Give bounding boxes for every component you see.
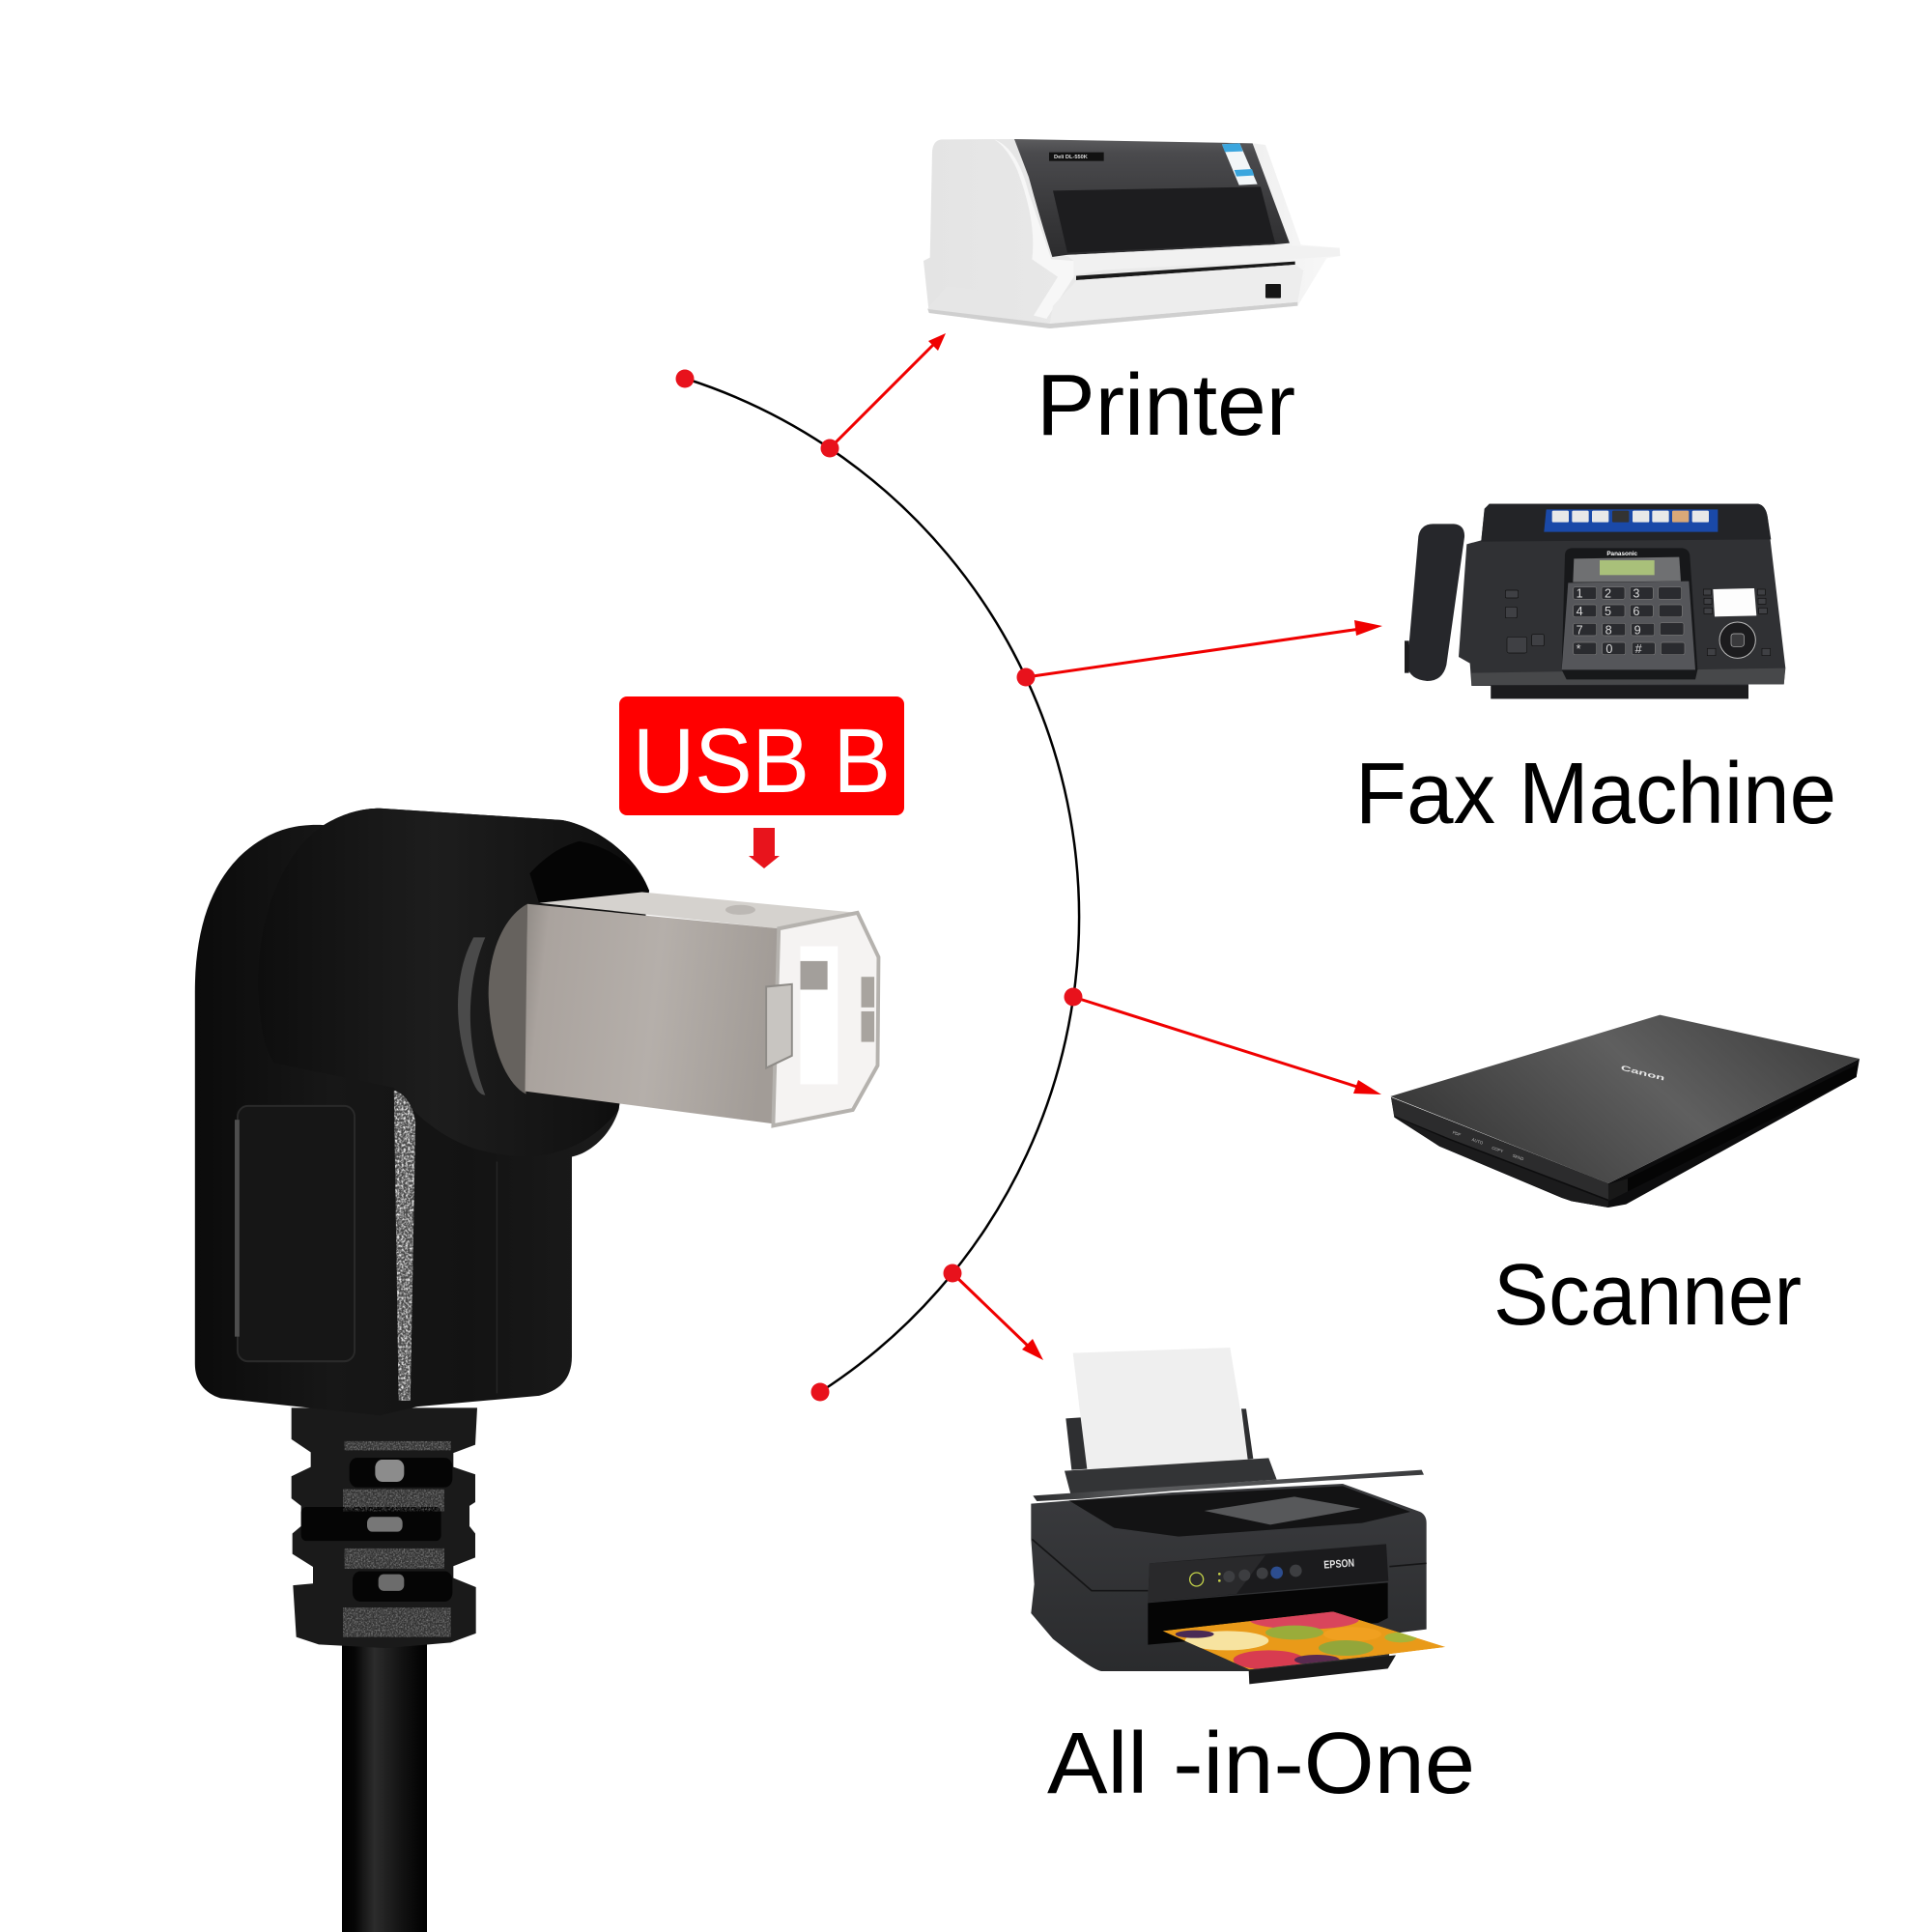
control panel — [1148, 1544, 1388, 1602]
fax keypad panel: 2 — [1605, 587, 1611, 601]
fax feature banner — [1544, 509, 1718, 532]
plug opening — [766, 913, 878, 1125]
arrow: to all-in-one — [943, 1264, 1043, 1360]
control panel: EPSON — [1323, 1557, 1354, 1572]
label: USB B: USB B — [633, 710, 891, 812]
fax keypad panel: * — [1577, 642, 1581, 656]
fax left buttons — [1505, 590, 1544, 653]
scanner front — [1391, 1097, 1608, 1200]
fax keypad panel: 1 — [1577, 587, 1583, 601]
fax keypad panel: 3 — [1633, 587, 1639, 601]
fax keypad panel: 7 — [1577, 623, 1583, 637]
printer white shell — [923, 139, 1340, 328]
fax handset — [1407, 524, 1464, 681]
printer power switch — [1265, 284, 1281, 298]
scanner buttons: SEND — [1512, 1153, 1524, 1161]
fax keypad panel: 6 — [1633, 605, 1639, 618]
arrow: label to plug — [749, 828, 780, 868]
arc end dots — [676, 369, 829, 1401]
printer brand badge — [1049, 153, 1104, 161]
fax keypad panel: 9 — [1634, 623, 1641, 637]
printer paper window — [1053, 186, 1275, 253]
fax keypad panel: Panasonic — [1606, 551, 1637, 557]
scanner lid — [1390, 1015, 1860, 1183]
metal plug top face — [539, 892, 858, 928]
paper supports — [1065, 1408, 1253, 1470]
device: scanner — [1390, 1015, 1860, 1208]
connector housing — [195, 809, 649, 1415]
fax keypad panel: 4 — [1577, 605, 1583, 618]
printer brand badge: Deli DL-550K — [1054, 155, 1089, 160]
arrow: to printer — [821, 333, 946, 458]
printed photo — [1162, 1610, 1446, 1669]
faint lower panel seam — [496, 1162, 498, 1393]
output tray — [1249, 1655, 1396, 1684]
collar highlight — [458, 937, 485, 1095]
main body — [1031, 1484, 1427, 1671]
strain relief boot — [292, 1407, 477, 1648]
scanner logo: Canon — [1620, 1064, 1666, 1083]
output slot — [1148, 1582, 1388, 1645]
body seam shadow — [1032, 1539, 1427, 1591]
fax keypad panel: # — [1635, 642, 1642, 656]
printer dark cover — [1014, 139, 1290, 257]
printer sticker — [1222, 143, 1258, 185]
label: All -in-One: All -in-One — [1047, 1716, 1475, 1812]
connection arc — [686, 379, 1079, 1392]
rear paper tray — [1065, 1458, 1277, 1494]
scanner buttons: AUTO — [1471, 1137, 1485, 1146]
printer paper tray — [1065, 244, 1340, 275]
fax keypad panel: 0 — [1605, 642, 1612, 656]
fax keypad panel — [1562, 548, 1697, 679]
scanner buttons: PDF — [1452, 1130, 1462, 1137]
scanner buttons — [1452, 1130, 1524, 1161]
label: Scanner: Scanner — [1493, 1247, 1802, 1344]
scanner base — [1391, 1059, 1860, 1208]
device: fax machine — [1405, 504, 1785, 698]
arrow: to scanner — [1065, 987, 1381, 1094]
fax keypad panel: 8 — [1605, 623, 1612, 637]
label: Fax Machine: Fax Machine — [1355, 746, 1836, 842]
top scan bed — [1069, 1486, 1410, 1537]
scanner lid — [1033, 1470, 1424, 1501]
grey collar face — [489, 904, 527, 1094]
fax right screen and controls — [1703, 588, 1771, 658]
fax body — [1459, 504, 1785, 698]
device: all-in-one printer — [1031, 1348, 1446, 1684]
scanner side edge — [1628, 1065, 1858, 1191]
right-angle USB B connector — [195, 809, 878, 1415]
input paper — [1073, 1348, 1249, 1469]
recessed label area — [238, 1106, 355, 1361]
metal plug side face — [526, 904, 779, 1123]
label: Printer: Printer — [1037, 357, 1295, 454]
arrow: to fax machine — [1016, 620, 1382, 686]
cable — [342, 1633, 427, 1932]
device: printer — [923, 139, 1340, 328]
grip highlight stripe — [394, 1091, 415, 1401]
scanner buttons: COPY — [1492, 1146, 1504, 1154]
fax keypad panel: 5 — [1605, 605, 1611, 618]
housing collar — [258, 809, 649, 1156]
